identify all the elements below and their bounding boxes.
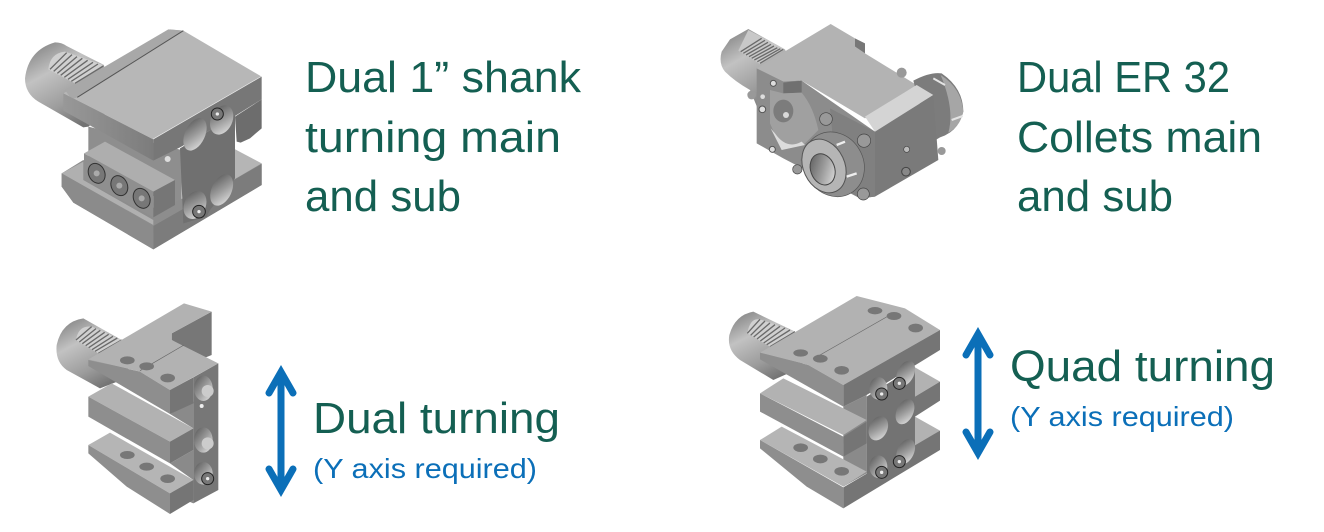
label: quad turning: Quad turning — [1010, 342, 1275, 391]
label: dual 1 inch shank: Dual 1” shank — [305, 53, 582, 102]
panel: quad turning — [729, 296, 1275, 508]
arrow: vertical Y axis — [269, 372, 293, 490]
illustration: dual turning holder — [56, 303, 218, 514]
label: Y axis required: (Y axis required) — [313, 453, 537, 484]
label: turning main: turning main — [305, 113, 561, 162]
label: and sub: and sub — [1017, 172, 1173, 221]
label: Y axis required: (Y axis required) — [1010, 401, 1234, 432]
front collet — [792, 121, 876, 208]
label: dual ER 32: Dual ER 32 — [1017, 53, 1230, 102]
illustration: quad turning holder — [729, 296, 940, 508]
panel: dual ER 32 collets — [721, 24, 1262, 221]
illustration: dual shank holder — [25, 29, 262, 249]
label: and sub: and sub — [305, 172, 461, 221]
arrow: vertical Y axis — [966, 334, 990, 453]
label: dual turning: Dual turning — [313, 394, 560, 443]
right collet — [913, 73, 963, 143]
illustration: dual collet holder — [721, 24, 963, 208]
panel: dual turning — [56, 303, 560, 514]
label: collets main: Collets main — [1017, 113, 1262, 162]
panel: dual 1 inch shank turning — [25, 29, 582, 249]
